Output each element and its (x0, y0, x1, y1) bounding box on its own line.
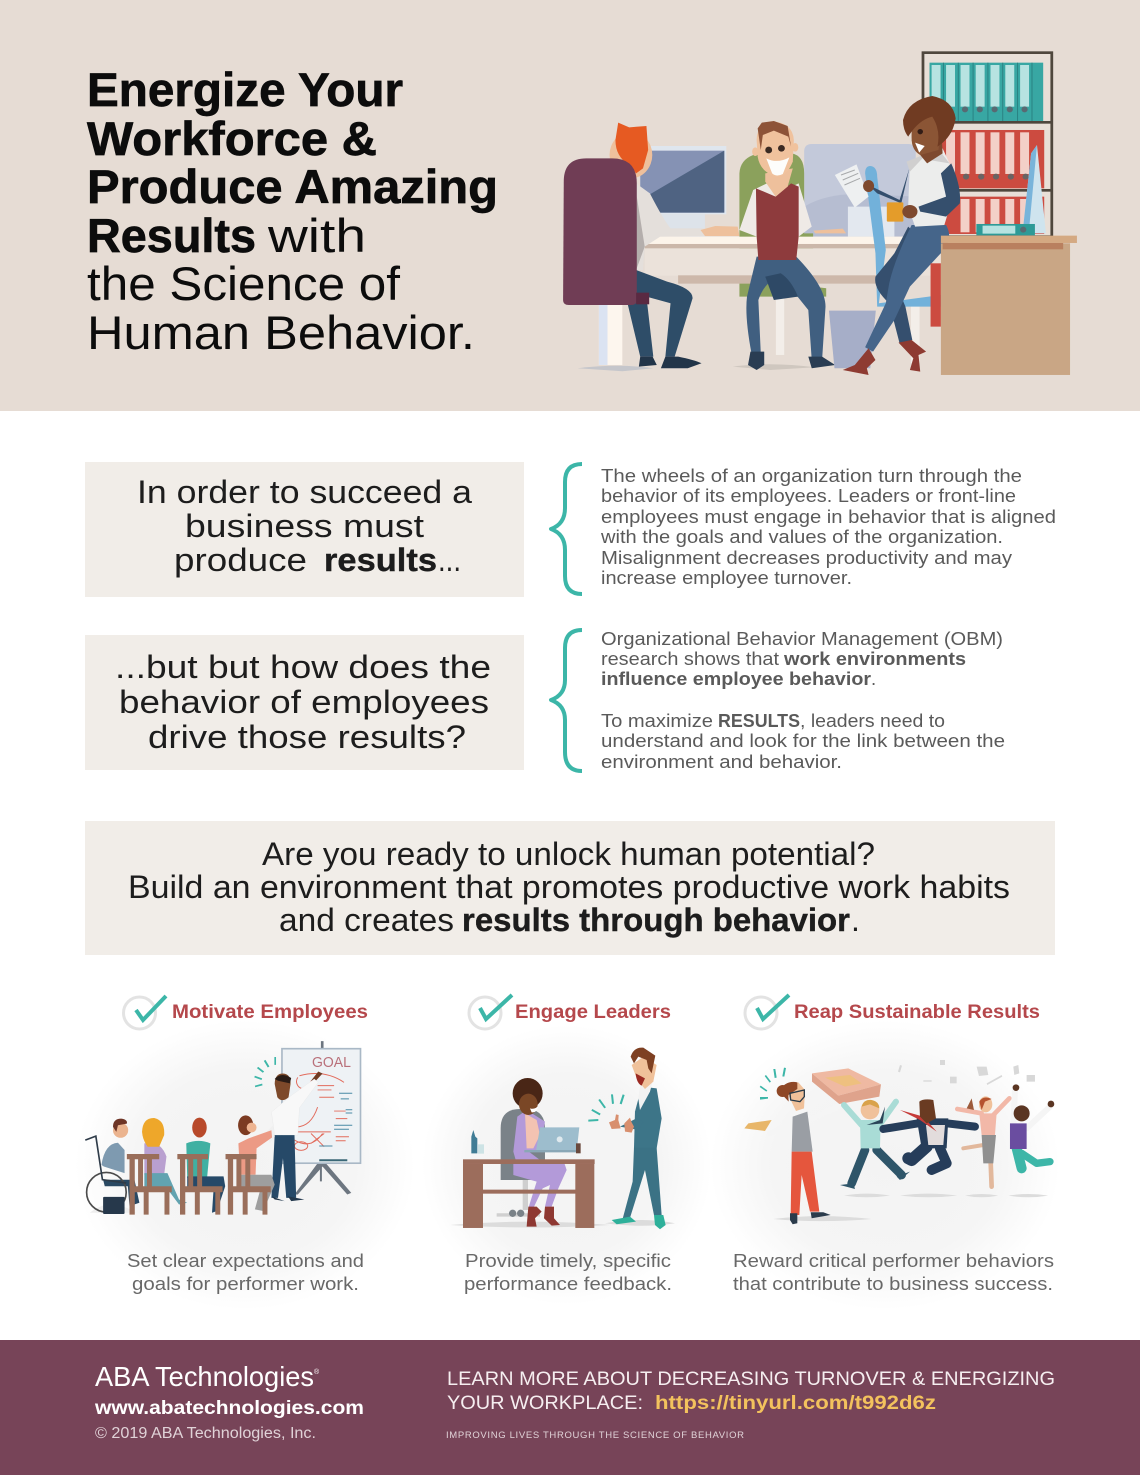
column: reap sustainable results (710, 995, 1060, 1310)
green chair (739, 153, 826, 297)
check icon (124, 996, 166, 1029)
panel: how behavior drives results (85, 635, 524, 770)
text block: organizational behavior management: research shows that (601, 648, 779, 669)
brace: first explanation (551, 464, 582, 594)
caption: that contribute to business success. (733, 1274, 1053, 1294)
call to learn more: https://tinyurl.com/t992d6z (655, 1392, 936, 1414)
text block: organizational behavior management: environment and behavior. (601, 751, 842, 772)
text block: wheels of an organization: with the goals and values of the organization. (600, 526, 1003, 547)
text block: organizational behavior management: influence employee behavior (601, 668, 871, 689)
title: Workforce & (87, 112, 377, 165)
computer monitor back, right (804, 144, 916, 237)
text block: organizational behavior management (601, 628, 1005, 772)
call to learn more: YOUR WORKPLACE: (447, 1392, 643, 1414)
audience (85, 1115, 275, 1215)
check icon (469, 995, 512, 1029)
panel: business must produce results: ... (438, 542, 461, 578)
jumping people (840, 1084, 1054, 1189)
person: seated man seen from behind (563, 123, 739, 368)
text block: wheels of an organization (600, 465, 1056, 588)
caption: Provide timely, specific (465, 1251, 671, 1271)
logo and contact: © 2019 ABA Technologies, Inc. (95, 1425, 316, 1442)
desk (645, 237, 944, 284)
text block: organizational behavior management: , leaders need to (800, 710, 945, 731)
woman with pizza box (744, 1082, 838, 1224)
panel: business must produce results (85, 462, 524, 597)
title: Results (87, 209, 256, 262)
desk (463, 1159, 595, 1228)
illustration: presenter at goal flip chart (85, 1041, 360, 1215)
logo and contact: ® (314, 1368, 320, 1376)
flying papers (898, 1060, 1035, 1085)
illustration: office team at a desk (563, 53, 1077, 375)
pizza box (812, 1068, 881, 1104)
heading: Reap Sustainable Results (794, 1001, 1040, 1023)
caption (464, 1251, 672, 1294)
person: standing woman with folder and mug (835, 96, 960, 375)
text block: organizational behavior management: To maximize (601, 710, 713, 731)
person: smiling man in red vest (739, 121, 846, 370)
panel: call to action banner: and creates (279, 902, 454, 938)
title: Energize Your (87, 63, 403, 116)
illustration: celebrating team with pizza (744, 1060, 1054, 1224)
panel: business must produce results: business must (185, 508, 424, 544)
text block: wheels of an organization: The wheels of an organization turn through the (601, 465, 1022, 486)
footer band (0, 1340, 1140, 1475)
text block: wheels of an organization: increase employee turnover. (601, 567, 852, 588)
illustration: leader giving thumbs up to employee (450, 1048, 675, 1229)
wastebasket (829, 311, 876, 368)
heading: Engage Leaders (515, 1001, 671, 1023)
title: the Science of (87, 257, 401, 310)
illustration: presenter at goal flip chart: GOAL (312, 1055, 351, 1071)
panel: call to action banner: . (851, 902, 860, 938)
chair stems (578, 297, 920, 371)
title: Human Behavior. (87, 306, 475, 359)
bookshelf (922, 53, 1053, 237)
title (87, 63, 498, 359)
title: with (267, 209, 366, 262)
panel: call to action banner: results through behavior (462, 902, 850, 938)
caption: performance feedback. (464, 1274, 672, 1294)
standing man (609, 1048, 666, 1229)
text block: organizational behavior management: . (871, 668, 876, 689)
desk, right (931, 224, 1077, 375)
title: Produce Amazing (87, 160, 498, 213)
computer monitor, left (640, 146, 726, 237)
check icon (745, 995, 789, 1029)
panel: how behavior drives results: drive those results? (148, 719, 466, 755)
text block: wheels of an organization: Misalignment decreases productivity and may (601, 547, 1013, 568)
logo and contact (94, 1361, 364, 1442)
text block: organizational behavior management: RESULTS (718, 710, 800, 731)
text block: organizational behavior management: understand and look for the link between the (601, 730, 1005, 751)
call to learn more: LEARN MORE ABOUT DECREASING TURNOVER & ENERGIZING (447, 1368, 1055, 1390)
panel: business must produce results: results (324, 542, 437, 578)
panel: call to action banner: Build an environment that promotes productive work habits (128, 869, 1010, 905)
blue office chair (865, 166, 941, 307)
caption: goals for performer work. (132, 1274, 359, 1294)
caption (733, 1251, 1054, 1294)
panel: call to action banner: Are you ready to unlock human potential? (262, 836, 875, 872)
caption: Reward critical performer behaviors (733, 1251, 1054, 1271)
brace: second explanation (551, 630, 582, 771)
header band (0, 0, 1140, 411)
heading: Motivate Employees (172, 1001, 368, 1023)
column: motivate employees (75, 996, 415, 1310)
panel: call to action banner (85, 821, 1055, 955)
call to learn more: IMPROVING LIVES THROUGH THE SCIENCE OF BEHAVIOR (446, 1430, 744, 1441)
text block: wheels of an organization: behavior of its employees. Leaders or front-line (601, 485, 1016, 506)
text block: organizational behavior management: Organizational Behavior Management (OBM) (601, 628, 1003, 649)
call to learn more (446, 1368, 1055, 1441)
panel: how behavior drives results: behavior of employees (119, 684, 489, 720)
text block: organizational behavior management: work environments (783, 648, 966, 669)
logo and contact: ABA Technologies (95, 1361, 314, 1392)
caption (127, 1251, 364, 1294)
caption: Set clear expectations and (127, 1251, 364, 1271)
panel: how behavior drives results: ...but but how does the (115, 649, 491, 685)
seated woman (513, 1078, 567, 1227)
column: engage leaders (422, 995, 712, 1305)
logo and contact: www.abatechnologies.com (94, 1398, 364, 1419)
panel: business must produce results: In order to succeed a (137, 474, 472, 510)
panel: business must produce results: produce (174, 542, 307, 578)
text block: wheels of an organization: employees must engage in behavior that is aligned (601, 506, 1056, 527)
